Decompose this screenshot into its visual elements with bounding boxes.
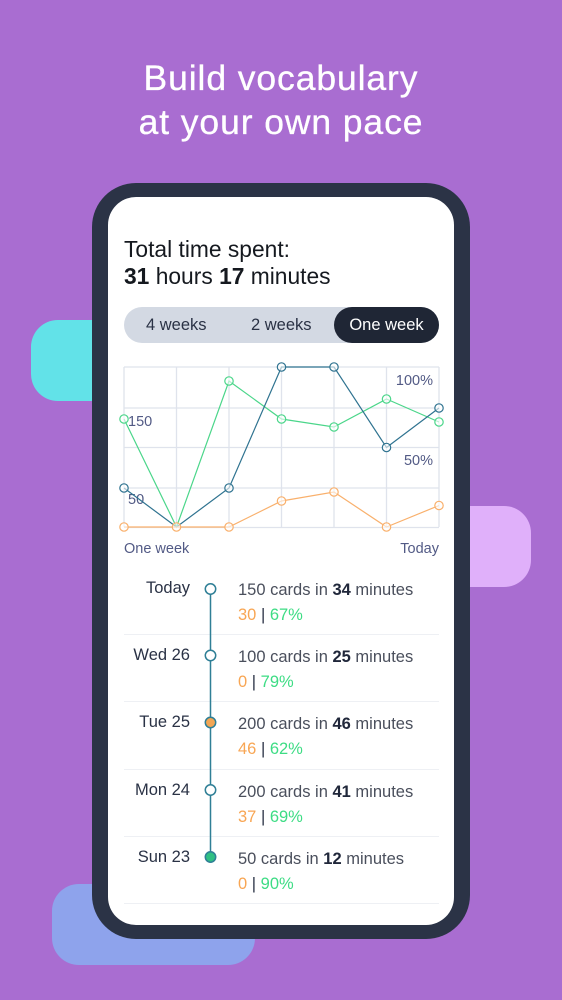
total time heading: Total time spent: — [124, 236, 290, 262]
daily rows: 100 cards in 25 minutes — [238, 648, 413, 666]
daily rows: 150 cards in 34 minutes — [238, 581, 413, 599]
series: orange — [120, 488, 443, 531]
decorative blob: lilac — [420, 506, 531, 587]
decorative blob: blue — [52, 884, 255, 965]
daily rows: Wed 26 — [133, 646, 190, 664]
phone frame — [92, 183, 470, 939]
daily rows: Mon 24 — [135, 781, 190, 799]
option: 2 weeks: 2 weeks — [251, 316, 312, 334]
option: 4 weeks: 4 weeks — [146, 316, 207, 334]
axis labels — [124, 373, 440, 557]
title: Build vocabulary — [144, 58, 418, 98]
daily rows: 0 | 90% — [238, 875, 294, 893]
daily rows: Today — [146, 579, 190, 597]
series: teal — [120, 363, 443, 527]
daily rows: 46 | 62% — [238, 740, 303, 758]
title: at your own pace — [139, 102, 423, 142]
axis labels: 100% — [396, 373, 433, 389]
daily rows: 200 cards in 41 minutes — [238, 783, 413, 801]
daily rows: Sun 23 — [138, 848, 190, 866]
daily rows: Tue 25 — [139, 713, 190, 731]
range selector — [124, 307, 439, 343]
axis labels: 150 — [128, 414, 152, 430]
line chart — [119, 362, 444, 557]
title — [139, 58, 423, 142]
decorative blob: cyan — [31, 320, 151, 401]
daily rows: 50 cards in 12 minutes — [238, 850, 404, 868]
option: One week selected — [334, 307, 439, 343]
option: One week selected: One week — [349, 316, 424, 334]
axis labels: 50% — [404, 453, 433, 469]
phone screen — [108, 197, 454, 925]
axis labels: 50 — [128, 492, 144, 508]
daily rows: 37 | 69% — [238, 808, 303, 826]
daily rows: 0 | 79% — [238, 673, 294, 691]
timeline — [204, 583, 216, 863]
daily rows: 200 cards in 46 minutes — [238, 715, 413, 733]
series: green — [120, 377, 443, 527]
total time heading: 31 hours 17 minutes — [124, 263, 331, 289]
axis labels: Today — [400, 541, 440, 557]
axis labels: One week — [124, 541, 190, 557]
daily rows: 30 | 67% — [238, 606, 303, 624]
total time heading — [124, 236, 331, 289]
